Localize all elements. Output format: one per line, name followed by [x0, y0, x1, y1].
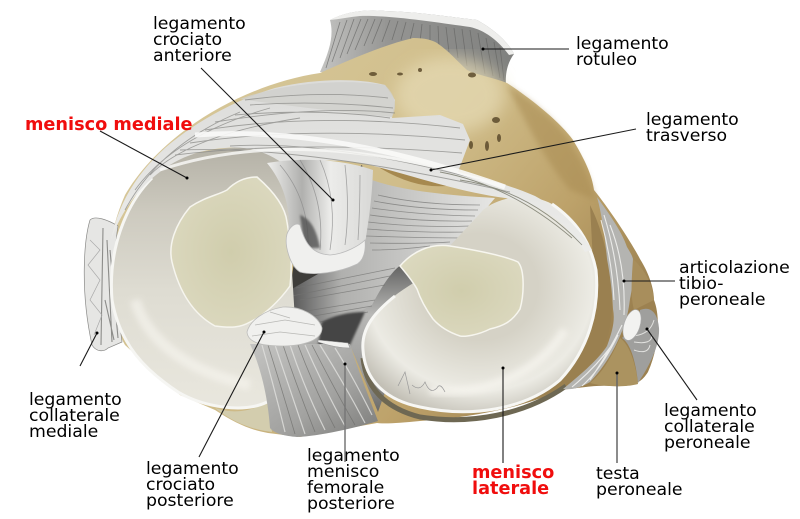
fibular head — [590, 338, 638, 386]
label: legamento trasverso: legamento — [646, 110, 739, 130]
label: legamento collaterale mediale — [29, 332, 122, 442]
ACL stump — [286, 224, 365, 274]
label: menisco laterale: menisco — [472, 463, 554, 483]
label: legamento menisco femorale posteriore: femorale — [307, 478, 384, 498]
label: articolazione tibio-peroneale: articolazione — [679, 258, 790, 278]
tibiofibular joint ligament — [563, 197, 654, 389]
label: legamento collaterale mediale: legamento — [29, 390, 122, 410]
label: legamento menisco femorale posteriore: menisco — [307, 462, 379, 482]
medial collateral ligament — [84, 218, 122, 351]
label: legamento rotuleo: rotuleo — [576, 50, 637, 70]
label: legamento crociato anteriore — [153, 14, 334, 202]
brown strip beside lateral meniscus — [520, 205, 612, 400]
label: legamento rotuleo: legamento — [576, 34, 669, 54]
label: legamento menisco femorale posteriore — [307, 362, 400, 514]
label: menisco mediale: menisco mediale — [25, 115, 193, 135]
bone highlight and shading — [395, 57, 505, 133]
medial meniscus — [111, 147, 295, 408]
label: legamento trasverso — [430, 110, 739, 172]
label: legamento crociato posteriore — [146, 330, 266, 511]
label: legamento collaterale mediale: collaterale — [29, 406, 120, 426]
label: testa peroneale: peroneale — [596, 480, 683, 500]
signature — [398, 372, 445, 394]
bone pits — [369, 68, 501, 151]
patellar ligament — [320, 10, 514, 86]
label: legamento crociato anteriore: anteriore — [153, 46, 232, 66]
label: menisco laterale: laterale — [472, 479, 549, 499]
label: legamento collaterale mediale: mediale — [29, 422, 98, 442]
label: articolazione tibio-peroneale: tibio- — [679, 274, 723, 294]
PCL stump — [247, 307, 322, 346]
pale anterior tibial strip under medial horn — [215, 402, 272, 432]
posterior cruciate ligament — [247, 307, 378, 437]
label: legamento crociato anteriore: legamento — [153, 14, 246, 34]
label: legamento collaterale peroneale: peroneale — [664, 433, 751, 453]
label: legamento crociato posteriore: crociato — [146, 475, 215, 495]
label: legamento crociato posteriore: legamento — [146, 459, 239, 479]
label: legamento trasverso: trasverso — [646, 126, 727, 146]
label: legamento collaterale peroneale: collaterale — [664, 417, 755, 437]
label: legamento collaterale peroneale: legamento — [664, 401, 757, 421]
lateral tibial plateau — [400, 245, 523, 336]
label: legamento crociato anteriore: crociato — [153, 30, 222, 50]
label: legamento crociato posteriore: posteriore — [146, 491, 234, 511]
knee illustration — [84, 10, 659, 437]
lateral meniscus — [363, 197, 597, 420]
label: legamento collaterale peroneale — [646, 328, 757, 453]
label: menisco mediale — [25, 115, 193, 180]
anterior cruciate ligament — [267, 160, 373, 274]
meniscofemoral band — [318, 340, 350, 348]
label: legamento menisco femorale posteriore: legamento — [307, 446, 400, 466]
label: testa peroneale — [596, 372, 683, 500]
label: articolazione tibio-peroneale — [622, 258, 790, 310]
transverse and anterior ligament bands — [111, 80, 592, 252]
label: testa peroneale: testa — [596, 464, 640, 484]
label: menisco laterale — [472, 366, 554, 499]
tibial bone — [108, 38, 658, 437]
medial tibial plateau — [171, 177, 291, 327]
label: legamento rotuleo — [482, 34, 669, 70]
tan area under transverse ligament — [372, 163, 462, 186]
label: legamento menisco femorale posteriore: posteriore — [307, 494, 395, 514]
fibular collateral ligament — [619, 307, 659, 383]
label: articolazione tibio-peroneale: peroneale — [679, 290, 766, 310]
central ligament field — [250, 165, 495, 412]
